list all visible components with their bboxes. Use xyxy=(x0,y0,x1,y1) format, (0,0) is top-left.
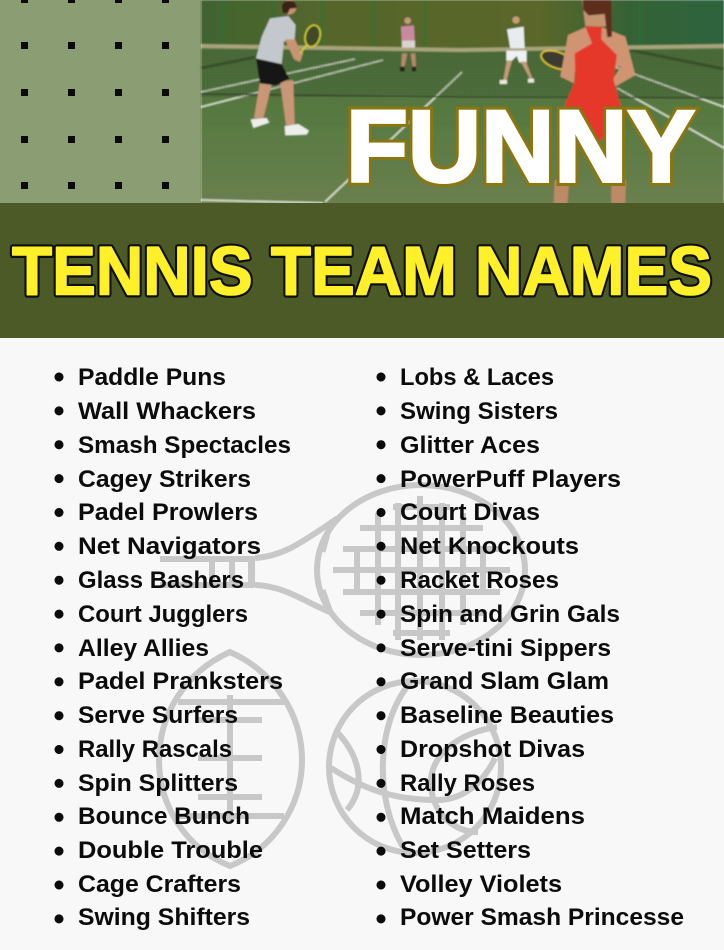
list: left column: Wall Whackers xyxy=(78,398,256,425)
icon: football watermark xyxy=(159,652,302,866)
list: left column: Swing Shifters xyxy=(78,904,250,931)
list: right column: Volley Violets xyxy=(400,871,562,898)
list: right column xyxy=(377,364,684,931)
list: right column: Set Setters xyxy=(400,837,531,864)
list: right column: Net Knockouts xyxy=(400,533,579,560)
front player woman xyxy=(539,0,635,203)
list: right column: Court Divas xyxy=(400,499,540,526)
list: right column: Grand Slam Glam xyxy=(400,668,609,695)
page background xyxy=(0,339,724,950)
list: left column: Serve Surfers xyxy=(78,702,238,729)
front player man xyxy=(251,0,323,135)
list: right column: PowerPuff Players xyxy=(400,466,621,493)
back player left xyxy=(400,17,416,71)
bullets left xyxy=(55,372,64,923)
net xyxy=(201,46,724,98)
list: right column: Dropshot Divas xyxy=(400,736,585,763)
list: right column: Spin and Grin Gals xyxy=(400,601,620,628)
photo: tennis court with players xyxy=(201,0,724,204)
list: right column: Rally Roses xyxy=(400,770,535,797)
list: right column: Swing Sisters xyxy=(400,398,558,425)
fence backdrop xyxy=(201,0,724,48)
list: left column: Net Navigators xyxy=(78,533,261,560)
list: left column: Spin Splitters xyxy=(78,770,238,797)
list: left column: Smash Spectacles xyxy=(78,432,291,459)
court lines xyxy=(201,59,724,203)
list: left column: Padel Prowlers xyxy=(78,499,258,526)
list: right column: Lobs & Laces xyxy=(400,364,554,391)
list: left column: Paddle Puns xyxy=(78,364,226,391)
back player right xyxy=(500,16,534,84)
racket xyxy=(300,23,323,53)
list: left column: Cage Crafters xyxy=(78,871,241,898)
bullets right xyxy=(377,372,386,923)
banner band xyxy=(0,203,724,338)
list: right column: Match Maidens xyxy=(400,803,585,830)
list: right column: Racket Roses xyxy=(400,567,559,594)
list: right column: Power Smash Princesse xyxy=(400,904,684,931)
list: left column: Padel Pranksters xyxy=(78,668,283,695)
list: right column: Baseline Beauties xyxy=(400,702,614,729)
list: left column: Cagey Strikers xyxy=(78,466,251,493)
list: left column: Court Jugglers xyxy=(78,601,248,628)
list: right column: Glitter Aces xyxy=(400,432,540,459)
list: left column: Bounce Bunch xyxy=(78,803,250,830)
icon: basketball watermark xyxy=(329,681,501,853)
list: left column: Rally Rascals xyxy=(78,736,232,763)
icon: tennis racket watermark xyxy=(160,485,525,655)
title: FUNNY: FUNNY xyxy=(346,90,695,204)
title: FUNNY: FUNNY xyxy=(346,90,695,204)
panel: dotted green block xyxy=(0,0,201,203)
list: right column: Serve-tini Sippers xyxy=(400,635,611,662)
list: left column: Alley Allies xyxy=(78,635,209,662)
list: left column: Double Trouble xyxy=(78,837,263,864)
list: left column xyxy=(55,364,291,931)
list: left column: Glass Bashers xyxy=(78,567,244,594)
